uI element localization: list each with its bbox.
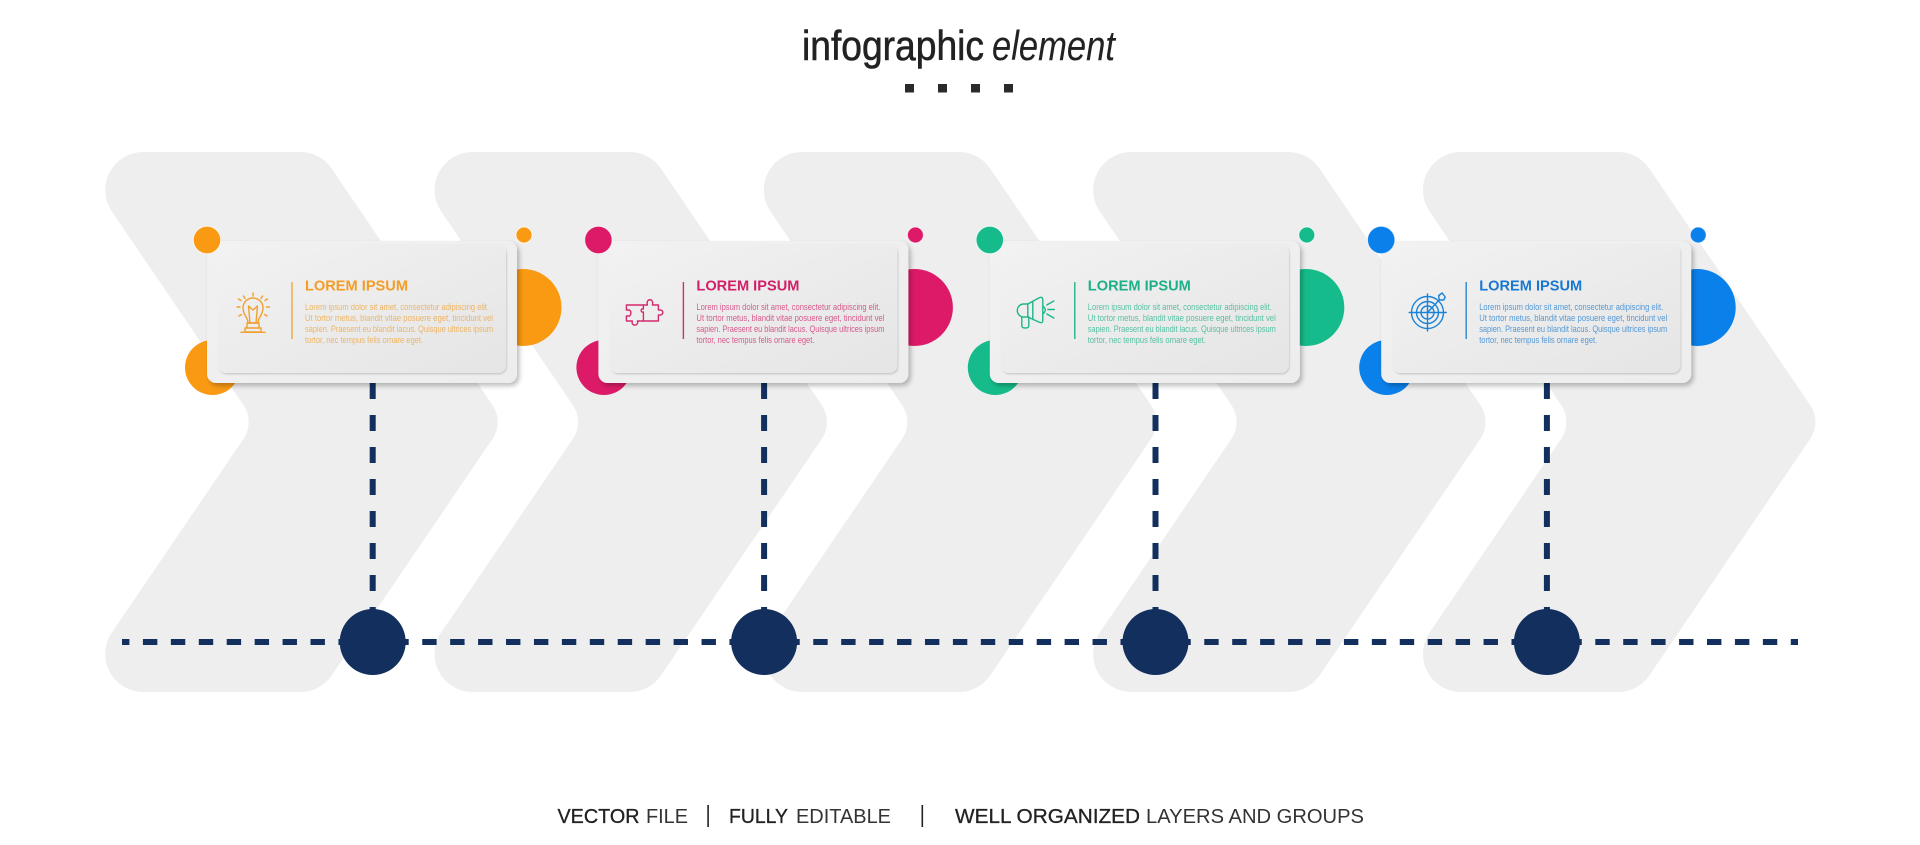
text block 3: tortor, nec tempus felis ornare eget. xyxy=(1088,335,1206,346)
text block 3: sapien. Praesent eu blandit lacus. Quisque ultrices ipsum xyxy=(1088,324,1276,335)
text block 4 xyxy=(1479,302,1667,346)
small dots 4 xyxy=(1368,226,1706,254)
text block 4: tortor, nec tempus felis ornare eget. xyxy=(1479,335,1597,346)
small dots 1 xyxy=(193,226,532,254)
footer: FULLY xyxy=(729,805,788,828)
card 3 xyxy=(990,241,1300,383)
step 4 xyxy=(1359,226,1736,675)
text block 3 xyxy=(1088,302,1276,346)
node 2 xyxy=(731,609,797,675)
card 4 xyxy=(1381,241,1691,383)
icon: target xyxy=(1409,293,1446,331)
heading 4: LOREM IPSUM xyxy=(1479,278,1582,295)
heading 3: LOREM IPSUM xyxy=(1088,278,1191,295)
text block 2: sapien. Praesent eu blandit lacus. Quisque ultrices ipsum xyxy=(696,324,884,335)
text block 1: sapien. Praesent eu blandit lacus. Quisque ultrices ipsum xyxy=(305,324,493,335)
node 3 xyxy=(1122,609,1188,675)
footer: EDITABLE xyxy=(796,805,891,828)
timeline: horizontal dashed line xyxy=(122,639,1798,645)
footer: LAYERS AND GROUPS xyxy=(1146,805,1364,828)
text block 1: Ut tortor metus, blandit vitae posuere eget, tincidunt vel xyxy=(305,313,493,324)
text block 3: Lorem ipsum dolor sit amet, consectetur adipiscing elit. xyxy=(1088,302,1272,313)
text block 1: Lorem ipsum dolor sit amet, consectetur adipiscing elit. xyxy=(305,302,489,313)
small dots 3 xyxy=(976,226,1315,254)
text block 2: tortor, nec tempus felis ornare eget. xyxy=(696,335,814,346)
text block 2: Ut tortor metus, blandit vitae posuere eget, tincidunt vel xyxy=(696,313,884,324)
title xyxy=(802,22,1117,69)
connector 2 xyxy=(761,351,767,612)
text block 2: Lorem ipsum dolor sit amet, consectetur adipiscing elit. xyxy=(696,302,880,313)
small dots 2 xyxy=(585,226,923,254)
title: infographic xyxy=(802,22,984,69)
step 3 xyxy=(968,226,1344,675)
text block 4: Ut tortor metus, blandit vitae posuere eget, tincidunt vel xyxy=(1479,313,1667,324)
text block 4: Lorem ipsum dolor sit amet, consectetur adipiscing elit. xyxy=(1479,302,1663,313)
heading 1: LOREM IPSUM xyxy=(305,278,408,295)
text block 3: Ut tortor metus, blandit vitae posuere eget, tincidunt vel xyxy=(1088,313,1276,324)
footer: VECTOR xyxy=(558,805,640,828)
step 1 xyxy=(185,226,562,675)
background chevrons xyxy=(105,152,1815,692)
accent circles 3 xyxy=(968,269,1344,395)
icon: light bulb xyxy=(237,293,270,332)
divider 2 xyxy=(682,282,684,339)
accent circles 4 xyxy=(1359,269,1736,395)
text block 1 xyxy=(305,302,493,346)
title dots xyxy=(905,84,1013,92)
footer xyxy=(558,805,1364,828)
step 2 xyxy=(576,226,953,675)
footer: FILE xyxy=(646,805,688,828)
text block 1: tortor, nec tempus felis ornare eget. xyxy=(305,335,423,346)
card 2 xyxy=(598,241,908,383)
heading 2: LOREM IPSUM xyxy=(696,278,799,295)
connector 3 xyxy=(1152,351,1158,612)
icon: puzzle xyxy=(626,300,663,325)
card 1 xyxy=(207,241,517,383)
connector 1 xyxy=(370,351,376,612)
connector 4 xyxy=(1544,351,1550,612)
divider 1 xyxy=(291,282,293,339)
divider 3 xyxy=(1074,282,1076,339)
accent circles 1 xyxy=(185,269,562,395)
footer: WELL ORGANIZED xyxy=(955,805,1140,828)
text block 4: sapien. Praesent eu blandit lacus. Quisque ultrices ipsum xyxy=(1479,324,1667,335)
divider 4 xyxy=(1465,282,1467,339)
accent circles 2 xyxy=(576,269,953,395)
text block 2 xyxy=(696,302,884,346)
icon: megaphone xyxy=(1017,297,1054,328)
node 1 xyxy=(340,609,406,675)
node 4 xyxy=(1514,609,1580,675)
title: element xyxy=(992,22,1117,69)
